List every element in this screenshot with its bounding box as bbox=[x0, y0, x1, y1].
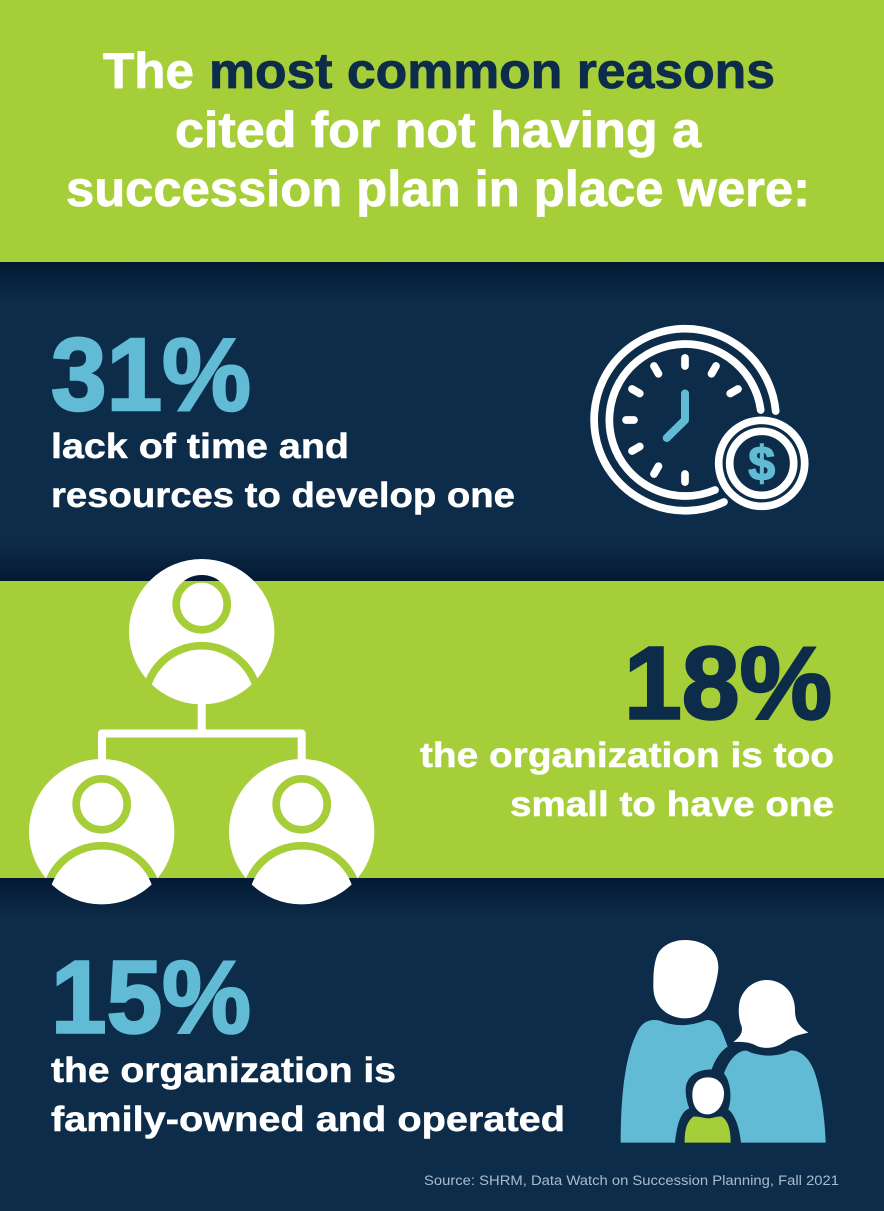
text: family-owned bbox=[51, 1051, 565, 1139]
panel: 31 percent bbox=[0, 262, 884, 581]
text: lack of time and resources bbox=[51, 427, 515, 515]
text: family-owned: the organization is bbox=[51, 1051, 396, 1090]
text: organization too small: small to have one bbox=[510, 785, 834, 824]
statistic: 18%: 18% bbox=[624, 626, 832, 740]
text: organization too small: the organization is too bbox=[420, 736, 834, 775]
text: lack of time and resources: lack of time and bbox=[51, 427, 349, 466]
title: most common reasons bbox=[209, 43, 775, 99]
icon: organization chart bbox=[29, 559, 374, 904]
title: cited for not having a bbox=[175, 102, 702, 158]
panel: title band bbox=[0, 0, 884, 262]
title: The bbox=[103, 43, 194, 99]
text: family-owned: family-owned and operated bbox=[51, 1100, 565, 1139]
icon: clock with dollar coin: $ bbox=[748, 438, 775, 491]
text: organization too small bbox=[420, 736, 834, 824]
panel: 15 percent bbox=[0, 878, 884, 1211]
statistic: 31%: 31% bbox=[51, 317, 251, 432]
title bbox=[66, 43, 810, 217]
title: succession plan in place were: bbox=[66, 161, 810, 217]
statistic: 15%: 15% bbox=[51, 940, 251, 1054]
icon: clock with dollar coin bbox=[594, 329, 805, 511]
icon: family bbox=[621, 940, 826, 1143]
source note: Source: SHRM, Data Watch on Succession Planning, Fall 2021 bbox=[424, 1173, 839, 1188]
text: lack of time and resources: resources to develop one bbox=[51, 476, 515, 515]
panel: 18 percent bbox=[0, 581, 884, 878]
